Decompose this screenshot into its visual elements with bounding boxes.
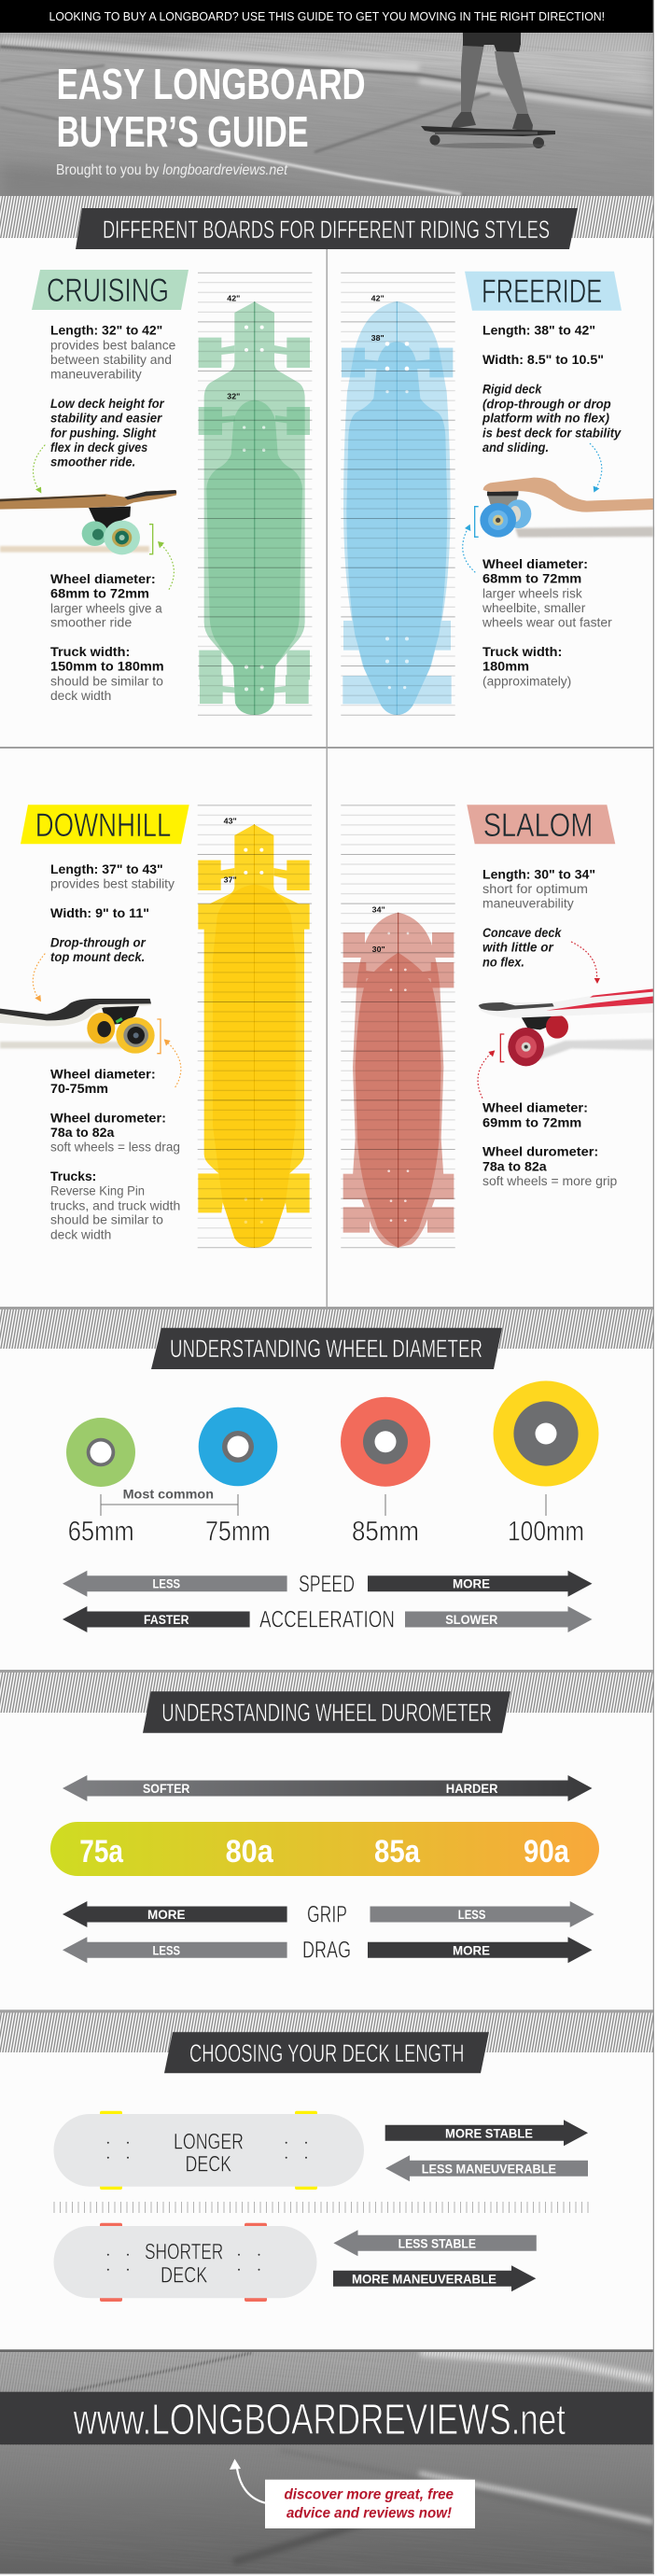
wheel: 65mm xyxy=(66,1418,135,1487)
cruising specs: length: between stability and xyxy=(50,352,172,367)
downhill specs: wheels and trucks: trucks, and truck width xyxy=(50,1197,180,1212)
longer deck arrows xyxy=(385,2120,588,2181)
freeride note xyxy=(482,382,622,455)
cruising specs: length xyxy=(50,323,176,381)
wheel size labels: 85mm xyxy=(352,1517,419,1547)
downhill arrow: deck xyxy=(33,954,45,1001)
freeride board chart: 42" xyxy=(371,294,384,302)
freeride specs: size: Length: 38" to 42" xyxy=(482,323,595,338)
slalom arrow: wheel xyxy=(478,1050,495,1099)
downhill specs: wheels and trucks: 70-75mm xyxy=(50,1081,108,1096)
skateboarder xyxy=(421,33,555,148)
cruising label: CRUISING xyxy=(47,273,169,309)
downhill board chart: 43" xyxy=(224,817,237,825)
freeride note: Rigid deck xyxy=(482,382,542,397)
wheel: 100mm xyxy=(493,1381,599,1486)
slalom specs: wheels: 69mm to 72mm xyxy=(482,1114,581,1129)
heading: wheel diameter xyxy=(151,1328,502,1369)
downhill specs: wheels and trucks: Wheel durometer: xyxy=(50,1110,166,1125)
shorter deck arrows: LESS STABLE xyxy=(398,2236,476,2250)
slalom specs: wheels: Wheel durometer: xyxy=(482,1144,598,1159)
durometer scale: 85a xyxy=(374,1834,421,1869)
cruising specs: wheels and trucks: smoother ride xyxy=(50,615,133,630)
cruising note: stability and easier xyxy=(50,411,163,426)
cruising arrow: wheel xyxy=(158,541,174,590)
cruising arrow: deck xyxy=(34,445,45,494)
slalom wheel bracket xyxy=(500,1034,504,1062)
freeride arrow: wheel xyxy=(463,525,475,572)
longer deck: LONGER xyxy=(174,2130,244,2155)
cruising specs: wheels and trucks: Wheel diameter: xyxy=(50,571,156,586)
drag arrows: LESS xyxy=(153,1943,180,1957)
cruising note: for pushing. Slight xyxy=(50,425,157,440)
slalom specs: wheels: soft wheels = more grip xyxy=(482,1173,618,1188)
slalom note: with little or xyxy=(482,940,554,955)
softer harder arrow: HARDER xyxy=(446,1782,498,1796)
longer deck arrows: MORE STABLE xyxy=(445,2126,533,2140)
slalom note xyxy=(482,925,562,969)
byline: Brought to you by longboardreviews.net xyxy=(56,162,287,178)
cruising board chart xyxy=(198,273,312,716)
freeride wheel bracket xyxy=(475,507,479,537)
softer harder arrow xyxy=(63,1775,592,1801)
acceleration arrows: FASTER xyxy=(144,1613,189,1627)
freeride skateboard photo xyxy=(480,478,653,538)
downhill label: DOWNHILL xyxy=(35,807,171,844)
panel: wheel diameter xyxy=(0,1307,653,1632)
downhill specs: wheels and trucks: Reverse King Pin xyxy=(50,1183,145,1198)
grip arrows: GRIP xyxy=(307,1901,347,1927)
wheel: 75mm xyxy=(199,1407,277,1486)
cruising note: flex in deck gives xyxy=(50,440,147,455)
slalom specs: length: Length: 30" to 34" xyxy=(482,866,595,881)
panel: downhill xyxy=(0,805,312,1248)
top bar xyxy=(0,0,653,33)
cruising board chart: 42" xyxy=(227,294,241,302)
freeride specs: size xyxy=(482,323,604,367)
freeride specs: wheels and trucks: wheels wear out faster xyxy=(482,615,612,630)
acceleration arrows: ACCELERATION xyxy=(259,1606,395,1632)
shorter deck: DECK xyxy=(161,2263,207,2289)
slalom board chart xyxy=(341,805,455,1248)
panel: slalom xyxy=(341,805,653,1248)
downhill specs: wheels and trucks: Wheel diameter: xyxy=(50,1067,156,1082)
downhill note: Drop-through or xyxy=(50,935,147,950)
downhill specs: size xyxy=(50,861,175,920)
downhill note xyxy=(50,935,147,964)
grip arrows xyxy=(63,1901,594,1927)
downhill skateboard photo xyxy=(0,999,155,1054)
callout: discover more great, free xyxy=(284,2487,454,2503)
cruising specs: wheels and trucks: Truck width: xyxy=(50,644,130,659)
heading: durometer xyxy=(143,1691,510,1733)
wheel size labels: 75mm xyxy=(205,1517,271,1547)
hero photo panel xyxy=(0,33,653,196)
freeride note: is best deck for stability xyxy=(482,425,622,440)
footer photo panel xyxy=(0,2349,653,2573)
slalom label: SLALOM xyxy=(483,807,593,844)
slalom skateboard photo xyxy=(479,988,653,1066)
cruising skateboard photo xyxy=(0,490,176,554)
cruising specs: length: maneuverability xyxy=(50,366,142,381)
wheel size labels xyxy=(68,1517,584,1547)
freeride board chart: 38" xyxy=(371,334,384,343)
wheel: 85mm xyxy=(341,1397,430,1487)
slalom board chart: 30" xyxy=(372,945,385,954)
freeride specs: wheels and trucks: Wheel diameter: xyxy=(482,556,588,571)
cruising note xyxy=(50,396,165,469)
freeride specs: wheels and trucks: 68mm to 72mm xyxy=(482,571,581,586)
wheel size labels: 65mm xyxy=(68,1517,134,1547)
speed arrows: MORE xyxy=(453,1577,490,1591)
downhill wheel bracket xyxy=(157,1019,161,1054)
drag arrows: MORE xyxy=(453,1943,490,1957)
durometer scale xyxy=(50,1822,599,1876)
shorter deck arrows xyxy=(333,2230,537,2291)
heading: deck length xyxy=(164,2032,489,2073)
cruising specs: wheels and trucks: 68mm to 72mm xyxy=(50,586,149,601)
cruising specs: length: provides best balance xyxy=(50,337,176,352)
freeride specs: wheels and trucks: larger wheels risk xyxy=(482,585,583,600)
downhill specs: size: Width: 9" to 11" xyxy=(50,905,149,920)
slalom specs: wheels: Wheel diameter: xyxy=(482,1100,588,1115)
cruising note: smoother ride. xyxy=(50,454,135,469)
heading: durometer: UNDERSTANDING WHEEL DUROMETER xyxy=(161,1699,492,1727)
freeride specs: wheels and trucks: 180mm xyxy=(482,659,529,674)
slalom specs: wheels: 78a to 82a xyxy=(482,1158,547,1173)
panel: freeride xyxy=(341,272,653,716)
speed arrows xyxy=(63,1571,592,1597)
heading: deck length: CHOOSING YOUR DECK LENGTH xyxy=(189,2039,465,2067)
downhill board chart xyxy=(198,805,312,1248)
panel: cruising xyxy=(0,270,312,716)
grip arrows: MORE xyxy=(147,1908,185,1922)
freeride note: platform with no flex) xyxy=(482,411,609,426)
shorter deck xyxy=(54,2223,317,2302)
slalom specs: length: short for optimum xyxy=(482,881,588,896)
title: EASY LONGBOARD xyxy=(57,60,366,108)
shorter deck arrows: MORE MANEUVERABLE xyxy=(352,2272,496,2286)
cruising specs: wheels and trucks xyxy=(50,571,164,703)
arrow to website xyxy=(230,2458,265,2503)
downhill specs: wheels and trucks: Trucks: xyxy=(50,1169,96,1183)
durometer scale: 80a xyxy=(226,1834,274,1869)
wheel size labels: 100mm xyxy=(508,1517,584,1547)
durometer scale: 90a xyxy=(524,1834,570,1869)
most common bracket xyxy=(101,1488,238,1516)
slalom note: Concave deck xyxy=(482,925,562,940)
softer harder arrow: SOFTER xyxy=(143,1782,190,1796)
callout xyxy=(265,2480,475,2528)
drag arrows: DRAG xyxy=(302,1938,351,1964)
acceleration arrows xyxy=(63,1606,592,1632)
cruising specs: wheels and trucks: larger wheels give a xyxy=(50,600,162,615)
top bar: LOOKING TO BUY A LONGBOARD? USE THIS GUIDE TO GET YOU MOVING IN THE RIGHT DIRECTION! xyxy=(49,9,605,23)
downhill specs: wheels and trucks: deck width xyxy=(50,1226,111,1241)
slalom specs: wheels xyxy=(482,1100,618,1188)
downhill specs: wheels and trucks: 78a to 82a xyxy=(50,1125,115,1140)
title: BUYER’S GUIDE xyxy=(57,107,309,156)
freeride specs: wheels and trucks: Truck width: xyxy=(482,644,562,659)
slalom arrow: deck xyxy=(571,942,600,984)
section stripes: riding styles xyxy=(0,196,653,238)
longer deck xyxy=(54,2111,364,2190)
cruising specs: wheels and trucks: 150mm to 180mm xyxy=(50,659,164,674)
longer deck: DECK xyxy=(185,2152,231,2177)
grip arrows: LESS xyxy=(458,1908,485,1922)
cruising wheel bracket xyxy=(149,525,153,554)
panel: deck length xyxy=(0,2009,653,2302)
downhill specs: size: Length: 37" to 43" xyxy=(50,861,163,876)
freeride note: and sliding. xyxy=(482,440,549,455)
freeride label: FREERIDE xyxy=(482,273,602,310)
callout: advice and reviews now! xyxy=(287,2505,453,2521)
drag arrows xyxy=(63,1937,592,1964)
cruising specs: wheels and trucks: should be similar to xyxy=(50,673,163,688)
heading: different boards xyxy=(76,208,578,249)
acceleration arrows: SLOWER xyxy=(445,1613,498,1627)
freeride specs: wheels and trucks: wheelbite, smaller xyxy=(482,600,586,615)
longer deck arrows: LESS MANEUVERABLE xyxy=(422,2162,556,2176)
slalom note: no flex. xyxy=(482,954,524,969)
downhill specs: size: provides best stability xyxy=(50,876,175,891)
heading: wheel diameter: UNDERSTANDING WHEEL DIAMETER xyxy=(170,1335,482,1363)
freeride specs: wheels and trucks: (approximately) xyxy=(482,673,571,688)
title xyxy=(57,60,366,156)
downhill specs: wheels and trucks: soft wheels = less drag xyxy=(50,1140,180,1155)
panel: wheel durometer xyxy=(0,1670,653,1964)
downhill specs: wheels and trucks: should be similar to xyxy=(50,1212,163,1227)
slalom board chart: 34" xyxy=(372,905,385,914)
freeride arrow: deck xyxy=(590,443,602,493)
cruising specs: length: Length: 32" to 42" xyxy=(50,323,162,338)
freeride note: (drop-through or drop xyxy=(482,396,611,411)
cruising specs: wheels and trucks: deck width xyxy=(50,688,111,703)
downhill arrow: wheel xyxy=(164,1039,181,1087)
freeride specs: wheels and trucks xyxy=(482,556,612,688)
speed arrows: SPEED xyxy=(299,1571,355,1597)
downhill board chart: 37" xyxy=(224,876,237,885)
most common bracket: Most common xyxy=(123,1488,214,1502)
speed arrows: LESS xyxy=(153,1577,180,1591)
cruising board chart: 32" xyxy=(227,393,241,401)
freeride specs: size: Width: 8.5" to 10.5" xyxy=(482,352,604,367)
slalom specs: length: maneuverability xyxy=(482,896,574,911)
shorter deck: SHORTER xyxy=(145,2240,223,2265)
downhill specs: wheels and trucks xyxy=(50,1067,180,1241)
cruising note: Low deck height for xyxy=(50,396,165,411)
freeride board chart xyxy=(341,273,455,716)
slalom specs: length xyxy=(482,866,595,911)
downhill note: top mount deck. xyxy=(50,949,145,964)
durometer scale: 75a xyxy=(79,1834,124,1869)
